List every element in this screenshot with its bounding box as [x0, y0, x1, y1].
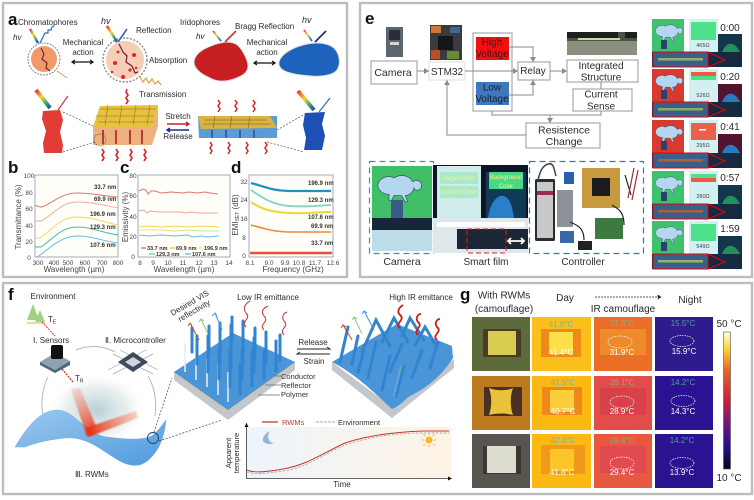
arrow: radiated heat	[62, 369, 73, 382]
chart b: transmittance: 600	[80, 260, 91, 267]
chart d: EMI shielding: 12.6	[327, 260, 340, 267]
chart b: transmittance: Transmittance (%)	[14, 184, 23, 250]
box: Camera	[371, 61, 417, 84]
chart d: EMI shielding: 16	[240, 216, 248, 223]
icon: red heat waves on orange block	[102, 89, 146, 161]
label: RWMs: Ⅲ. RWMs	[75, 470, 109, 479]
legend: Environment	[316, 418, 381, 427]
labels: layers: Reflector	[281, 381, 312, 390]
label: hv small: hv	[13, 33, 22, 42]
label: Mechanical action left: Mechanical	[63, 38, 103, 47]
illustration: low IR pillar array	[174, 317, 295, 420]
chart d: EMI shielding: 24	[240, 197, 248, 204]
icon: sun	[422, 433, 436, 447]
label: High IR emittance: High IR emittance	[389, 293, 453, 302]
time-lapse row 4	[652, 171, 742, 219]
thermal row 2: 41.5°C	[551, 378, 575, 387]
time-lapse row 2	[652, 69, 742, 117]
chart b: transmittance: 20	[25, 239, 33, 246]
chart d: EMI shielding: 69.9 nm	[311, 224, 333, 230]
label: Iridophores: Iridophores	[180, 18, 220, 27]
thermal row 1: 15.9°C	[672, 347, 696, 356]
chart c: emissivity: 60	[129, 193, 137, 200]
time-lapse row 5: 1:59	[720, 224, 740, 235]
label: Mechanical action right: action	[256, 48, 278, 57]
box: Resistence Change: Resistence	[538, 124, 590, 136]
chart c: emissivity: 11	[180, 260, 187, 267]
panel: e	[360, 3, 752, 277]
label: hv large: hv	[101, 16, 111, 26]
thermal row 2: 14.2°C	[671, 378, 695, 387]
box: Relay: Relay	[520, 66, 546, 77]
icon: RWM sheet	[15, 410, 166, 465]
label: Chromatophores: Chromatophores	[18, 18, 78, 27]
icon: orange stretched block	[93, 105, 158, 146]
chart b: transmittance: b	[8, 158, 18, 177]
label: Mechanical action right	[247, 38, 287, 57]
thermal row 2: 28.9°C	[610, 407, 634, 416]
label: Mechanical action right: Mechanical	[247, 38, 287, 47]
label: Low IR emittance: Low IR emittance	[237, 293, 299, 302]
icon: red iridophore	[194, 31, 248, 81]
label: Strain: Strain	[304, 357, 324, 366]
chart c: emissivity: 129.3 nm	[156, 252, 180, 258]
label: Desired VIS reflectivity: Desired VIS	[169, 289, 210, 318]
icon: large chromatophore	[103, 26, 161, 85]
time-lapse row 1	[652, 19, 742, 67]
arrows: release and strain	[297, 347, 330, 354]
icon: trees	[27, 304, 45, 323]
chart d: EMI shielding: 9.0	[264, 260, 274, 267]
heading: e: e	[365, 9, 374, 28]
time-lapse row 3	[652, 120, 742, 168]
box: Camera: Camera	[374, 67, 412, 79]
chart c: emissivity: 14	[225, 260, 233, 267]
panel: a to d	[3, 3, 347, 277]
thermal row 1: 41.6°C	[549, 320, 573, 329]
arrow: mechanical action right	[254, 61, 275, 65]
box: voltage group: Low	[483, 82, 502, 94]
chart b: transmittance: 129.3 nm	[90, 225, 116, 231]
labels: layers: Conductor	[281, 372, 316, 381]
label: Stretch: Stretch	[165, 112, 191, 121]
axis label: Apparent temperature: temperature	[232, 433, 241, 473]
chart b: transmittance: 0	[27, 255, 31, 262]
icon: blue iridophore	[279, 30, 339, 76]
labels: layers	[258, 372, 316, 399]
label: Sensors: Ⅰ. Sensors	[33, 336, 69, 345]
box: Integrated Structure: Structure	[581, 72, 622, 84]
label: With RWMs camouflage: (camouflage)	[475, 304, 533, 315]
thermal row 1: 31.9°C	[610, 348, 634, 357]
label: Release: Release	[163, 132, 193, 141]
chart c: emissivity: 69.9 nm	[176, 246, 197, 252]
icon: camera photo	[386, 27, 403, 57]
label: Transmission: Transmission	[139, 90, 186, 99]
box: Current Sense	[573, 89, 632, 112]
thermal row 3: 13.9°C	[670, 468, 694, 477]
label: hv iridophore: hv	[196, 32, 205, 41]
icon: sensor	[40, 345, 70, 373]
thermal row 3: 29.8°C	[610, 436, 634, 445]
photo: smart film: Background	[490, 175, 522, 181]
icon: moon	[263, 431, 274, 444]
time-lapse row 5: 549Ω	[696, 244, 710, 250]
label: Microcontroller: Ⅱ. Microcontroller	[105, 336, 166, 345]
chart c: emissivity: 33.7 nm	[147, 246, 168, 252]
box: voltage group: Voltage	[475, 49, 509, 60]
chart b: transmittance: 500	[63, 260, 74, 267]
label: With RWMs camouflage: With RWMs	[478, 290, 530, 302]
icon: blue thin block	[198, 116, 277, 138]
chart d: EMI shielding: 0	[242, 253, 246, 260]
colour bar	[716, 319, 742, 484]
chart c: emissivity: 10	[164, 260, 172, 267]
label: With RWMs camouflage	[475, 290, 533, 315]
label: Mechanical action left	[63, 38, 103, 57]
box: voltage group: Voltage	[475, 94, 509, 105]
label: hv right: hv	[302, 15, 312, 25]
chart b: transmittance: 60	[25, 206, 33, 213]
chart c: emissivity: 40	[129, 214, 137, 221]
chart c: emissivity	[120, 158, 233, 274]
chart d: EMI shielding: 11.7	[309, 260, 321, 267]
label: Night: Night	[678, 295, 702, 306]
thermal row 3	[472, 434, 713, 488]
colour bar: 50 °C	[716, 319, 742, 330]
photo: controller	[530, 162, 644, 254]
heading: g: g	[460, 285, 470, 304]
chart d: EMI shielding: EMI	[231, 221, 240, 236]
thermal row 2: 40.7°C	[551, 407, 575, 416]
box: Resistence Change: Change	[546, 136, 583, 148]
thermal row 3: 29.4°C	[610, 468, 634, 477]
arcs: control loop	[42, 346, 156, 416]
thermal row 1	[472, 317, 713, 371]
box: voltage group: High	[482, 38, 502, 48]
chart d: EMI shielding: 32	[240, 179, 248, 186]
label: TE: E	[53, 320, 57, 326]
label: Day: Day	[556, 293, 574, 304]
glow: sheet radiation	[47, 372, 147, 448]
box: Current Sense: Current	[584, 90, 618, 100]
arrows: desired VIS reflectivity low	[188, 313, 222, 340]
label: Release: Release	[298, 338, 328, 347]
panel: f and g	[3, 283, 752, 494]
thermal row 2	[472, 376, 713, 430]
photo: smart film: Color	[499, 184, 513, 190]
photo: smart film: Target Color	[443, 176, 475, 182]
arrow: reflected heat beam	[71, 388, 138, 437]
time-lapse row 3: 295Ω	[696, 143, 710, 149]
label: Camera: Camera	[383, 256, 421, 268]
chart c: emissivity: c	[120, 158, 129, 177]
chart b: transmittance: Wavelength (µm)	[44, 265, 105, 274]
heading: f: f	[8, 285, 14, 304]
time-lapse row 5	[652, 221, 742, 269]
label: TE: T	[48, 315, 53, 324]
chart c: emissivity: 8	[138, 260, 142, 267]
time-lapse row 4: 280Ω	[696, 194, 710, 200]
chart d: EMI shielding: 129.3 nm	[308, 198, 334, 204]
heading: a: a	[8, 10, 18, 29]
chart b: transmittance: 300	[33, 260, 44, 267]
icon: red twisted structure	[36, 90, 68, 153]
chart c: emissivity: 80	[129, 173, 137, 180]
chart c: emissivity: 20	[129, 234, 137, 241]
chart c: emissivity: Wavelength (µm)	[154, 265, 215, 274]
chart c: emissivity: 0	[131, 254, 135, 261]
axis label: Time: Time	[333, 480, 351, 489]
chart d: EMI shielding: 8	[242, 235, 246, 242]
label: Controller: Controller	[561, 257, 605, 268]
label: Bragg Reflection: Bragg Reflection	[235, 22, 294, 31]
colour bar: 10 °C	[716, 473, 742, 484]
chart b: transmittance: 400	[49, 260, 60, 267]
zoom circle and dashed lines	[148, 378, 222, 444]
chart c: emissivity: 12	[195, 260, 203, 267]
chart d: EMI shielding: 196.9 nm	[308, 181, 334, 187]
icon: STM32 board photo	[430, 25, 462, 60]
chart d: EMI shielding: (dB)	[231, 194, 240, 212]
chart b: transmittance	[8, 158, 124, 274]
box: STM32: STM32	[431, 67, 464, 78]
chart d: EMI shielding	[231, 158, 340, 274]
arrow: environment heat	[42, 322, 55, 336]
label: Reflection: Reflection	[136, 26, 172, 35]
chart b: transmittance: 80	[25, 190, 33, 197]
chart b: transmittance: 100	[24, 173, 35, 180]
icon: small chromatophore	[28, 26, 67, 78]
label: Desired VIS reflectivity: reflectivity	[177, 298, 212, 324]
chart: apparent temperature	[224, 418, 452, 489]
chart b: transmittance: 69.9 nm	[94, 197, 116, 203]
time-lapse row 2: 526Ω	[696, 93, 710, 99]
photo: smart film: Current Color	[441, 190, 477, 196]
chart d: EMI shielding: 10.8	[293, 260, 306, 267]
labels: layers: Polymer	[281, 390, 309, 399]
photo: camera dashed group	[370, 162, 434, 254]
arrow: mechanical action left	[72, 60, 93, 64]
arrows: stretch and release	[167, 122, 189, 132]
icon: red infrared waves high	[398, 305, 440, 340]
chart d: EMI shielding: 107.6 nm	[308, 215, 334, 221]
box: Current Sense: Sense	[587, 102, 616, 112]
time-lapse row 2: 0:20	[720, 72, 740, 83]
chart c: emissivity: 9	[151, 260, 155, 267]
chart d: EMI shielding: 8.1	[245, 260, 255, 267]
label: Mechanical action left: action	[72, 48, 94, 57]
box: Integrated Structure	[567, 60, 638, 84]
icon: red infrared waves low	[244, 301, 287, 335]
legend: RWMs	[262, 418, 305, 427]
arrows: desired VIS reflectivity high	[341, 311, 374, 340]
chart d: EMI shielding: Frequency (GHz)	[262, 265, 324, 274]
chart b: transmittance: 107.6 nm	[90, 243, 116, 249]
illustration: high IR pillar array	[332, 318, 454, 418]
chart b: transmittance: 196.9 nm	[90, 212, 116, 218]
icon: red heat waves on blue block	[210, 100, 267, 154]
label: TR: R	[80, 378, 84, 384]
chart d: EMI shielding: d	[231, 158, 241, 177]
chart c: emissivity: 13	[210, 260, 218, 267]
chart d: EMI shielding: 9.9	[280, 260, 290, 267]
box: Relay	[518, 62, 550, 80]
chart b: transmittance: 700	[97, 260, 108, 267]
photo: integrated structure	[567, 32, 637, 55]
label: Smart film: Smart film	[464, 257, 508, 268]
thermal row 1: 41.4°C	[549, 348, 573, 357]
thermal row 1: 31.3°C	[610, 319, 634, 328]
photo: smart film	[433, 165, 528, 253]
chart c: emissivity: Emissivity (%)	[121, 192, 130, 242]
label: TR: T	[75, 374, 80, 383]
icon: microchip	[108, 350, 158, 374]
chart c: emissivity: 107.6 nm	[192, 252, 216, 258]
time-lapse row 1: 465Ω	[696, 43, 710, 49]
time-lapse row 3: 0:41	[720, 122, 740, 133]
label: IR camouflage: IR camouflage	[591, 304, 656, 315]
chart c: emissivity: 196.9 nm	[204, 246, 228, 252]
thermal row 2: 29.1°C	[610, 378, 634, 387]
chart d: EMI shielding: SET	[235, 212, 241, 221]
time-lapse row 1: 0:00	[720, 23, 740, 34]
thermal row 3: 14.2°C	[670, 436, 694, 445]
chart b: transmittance: 40	[25, 223, 33, 230]
chart b: transmittance: 33.7 nm	[94, 185, 116, 191]
flow arrows	[417, 47, 601, 135]
chart d: EMI shielding: 33.7 nm	[311, 241, 333, 247]
legend: RWMs: RWMs	[282, 418, 305, 427]
box: voltage group	[473, 33, 512, 111]
box: Integrated Structure: Integrated	[578, 61, 624, 72]
icon: blue twisted structure	[298, 91, 330, 150]
legend: Environment: Environment	[338, 418, 381, 427]
label: Absorption: Absorption	[149, 56, 187, 65]
thermal row 3: 41.8°C	[550, 468, 574, 477]
thermal row 3: 42.8°C	[551, 436, 575, 445]
axis label: Apparent temperature	[224, 433, 241, 473]
chart b: transmittance: 800	[113, 260, 124, 267]
time-lapse row 4: 0:57	[720, 173, 740, 184]
thermal row 1: 15.5°C	[671, 319, 695, 328]
box: Resistence Change	[526, 123, 600, 148]
label: Environment: Environment	[31, 292, 76, 301]
arrow: day to night	[595, 295, 661, 299]
axis label: Apparent temperature: Apparent	[224, 437, 233, 468]
box: STM32	[429, 62, 465, 80]
thermal row 2: 14.3°C	[671, 407, 695, 416]
